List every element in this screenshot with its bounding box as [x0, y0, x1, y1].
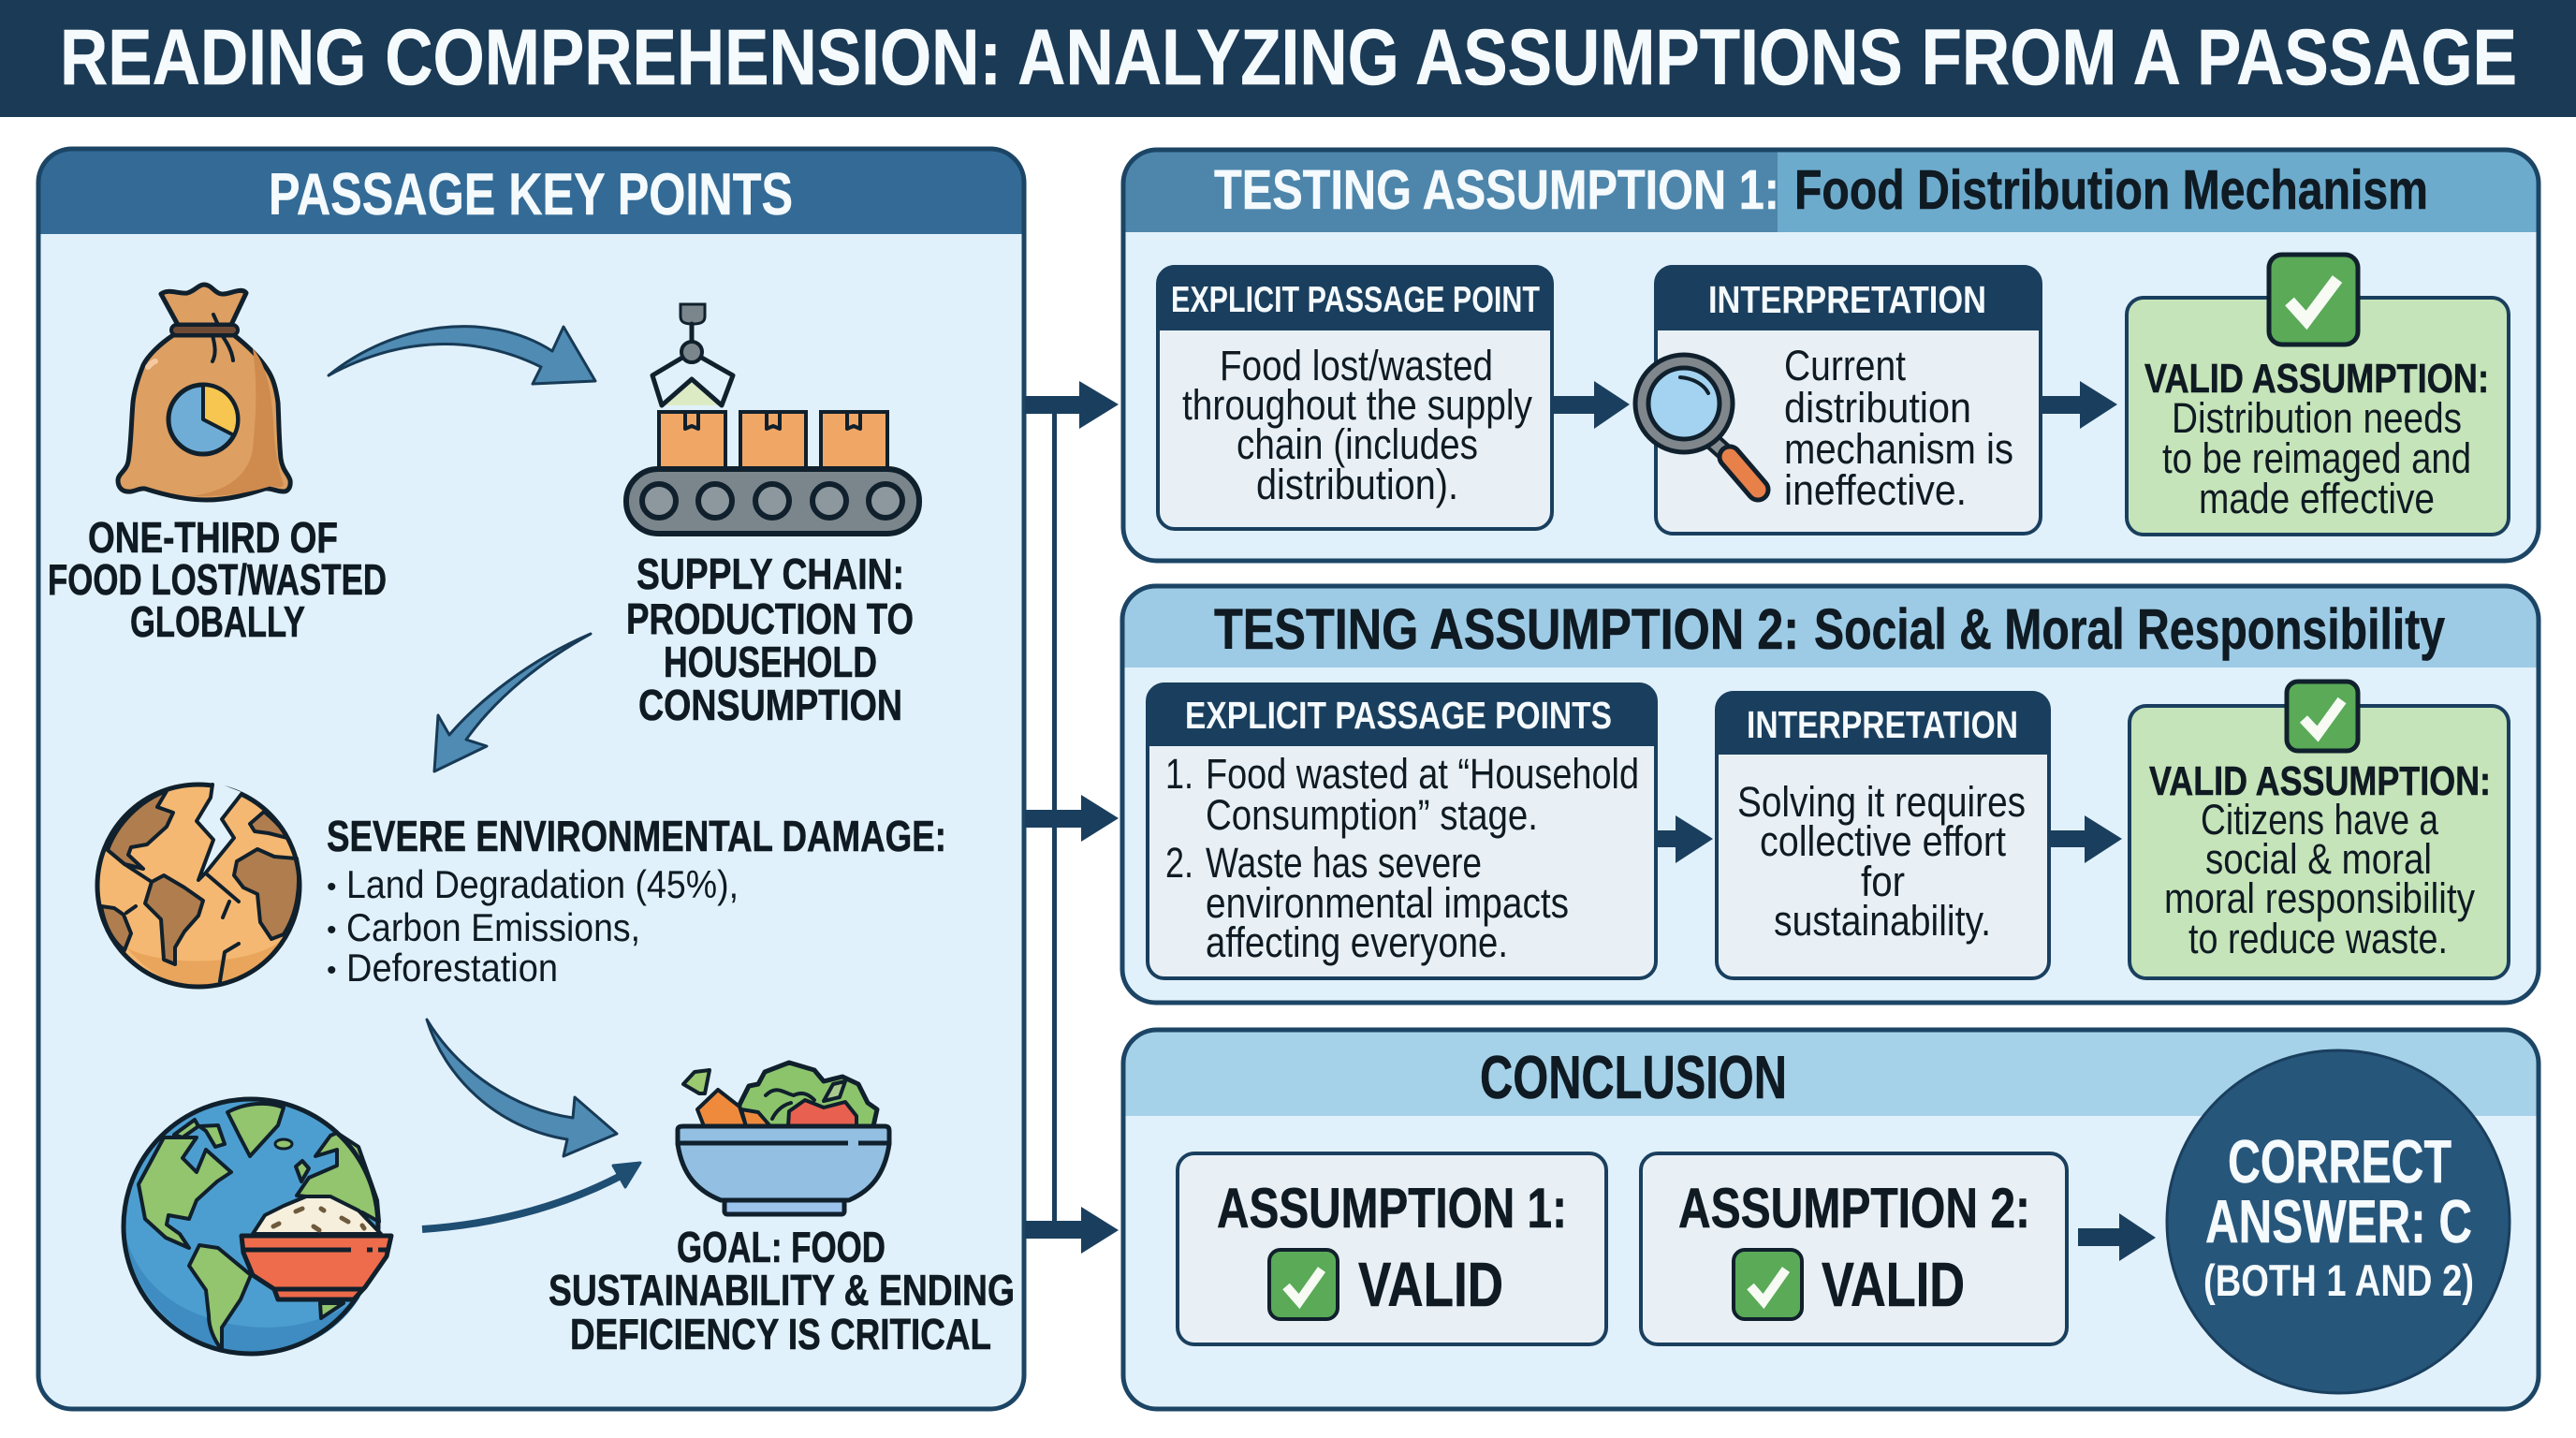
box: explicit passage points: Consumption” stage.	[1206, 791, 1538, 839]
box: interpretation: collective effort	[1760, 817, 2006, 865]
icon: check badge	[2287, 682, 2358, 751]
heading: conclusion	[1123, 1030, 2539, 1116]
box: explicit passage points: affecting everyone.	[1206, 918, 1508, 966]
box: explicit passage points: environmental impacts	[1206, 879, 1569, 927]
box: valid assumption 1: Distribution needs	[2172, 394, 2462, 442]
box: explicit passage point: chain (includes	[1237, 420, 1478, 468]
box: interpretation	[1717, 691, 2049, 978]
text: goal: SUSTAINABILITY & ENDING	[549, 1266, 1015, 1314]
heading: testing assumption 1: Food Distribution Mechanism	[1794, 159, 2428, 221]
heading: passage key points	[38, 149, 1024, 234]
text: severe environmental damage: •	[327, 955, 337, 986]
box: interpretation	[1656, 265, 2041, 534]
box: interpretation: for	[1861, 858, 1905, 905]
box: valid assumption 1	[2127, 255, 2509, 535]
box: valid assumption 2	[2130, 682, 2509, 978]
box: explicit passage points: 1.	[1165, 750, 1193, 798]
icon: check	[1734, 1250, 1802, 1319]
box: valid assumption 2: social & moral	[2205, 835, 2432, 883]
heading: testing assumption 2: TESTING ASSUMPTION 2:	[1214, 597, 1799, 661]
box: valid assumption 2: moral responsibility	[2164, 874, 2475, 922]
box: valid assumption 2: Citizens have a	[2201, 796, 2439, 844]
heading: testing assumption 2	[1122, 586, 2539, 668]
arrow: interpretation to valid	[2042, 381, 2117, 429]
text: severe environmental damage: Carbon Emissions,	[346, 905, 640, 949]
text: supply chain: SUPPLY CHAIN:	[637, 550, 904, 598]
text: one-third of food: GLOBALLY	[130, 597, 305, 646]
box: interpretation: Solving it requires	[1737, 778, 2026, 826]
text: goal: GOAL: FOOD	[677, 1223, 886, 1271]
box: explicit passage points	[1148, 682, 1656, 978]
panel: testing assumption 2	[1122, 586, 2539, 1003]
heading: testing assumption 1: TESTING ASSUMPTION 1:	[1214, 159, 1779, 221]
box: explicit passage point	[1158, 265, 1552, 529]
box: valid assumption 1: to be reimaged and	[2162, 434, 2471, 482]
callout: correct answer	[2167, 1050, 2510, 1393]
box: interpretation: Current	[1784, 342, 1906, 389]
box: assumption 1 valid: VALID	[1358, 1250, 1503, 1320]
heading: conclusion: CONCLUSION	[1480, 1043, 1787, 1111]
box: interpretation: INTERPRETATION	[1708, 278, 1986, 321]
text: severe environmental damage: Deforestation	[346, 946, 558, 990]
box: assumption 2 valid: ASSUMPTION 2:	[1678, 1177, 2030, 1240]
box: interpretation: sustainability.	[1774, 897, 1991, 945]
icon: salad bowl	[678, 1063, 889, 1214]
icon: cracked earth	[97, 781, 300, 987]
box: explicit passage point: Food lost/wasted	[1220, 342, 1493, 389]
text: supply chain: HOUSEHOLD	[664, 638, 877, 686]
box: explicit passage point: distribution).	[1256, 461, 1458, 508]
text: supply chain	[626, 550, 914, 729]
box: explicit passage points: 2.	[1165, 839, 1193, 887]
arrow: sack to supply chain	[329, 327, 595, 384]
text: severe environmental damage: •	[327, 915, 337, 946]
arrow: supply chain to environmental damage	[434, 634, 591, 771]
icon: food sack with pie chart	[118, 285, 290, 500]
arrow: passage point to interpretation	[1554, 381, 1630, 429]
box: assumption 1 valid	[1178, 1153, 1606, 1344]
arrow: environmental damage to goal	[427, 1020, 617, 1156]
text: goal	[549, 1223, 1015, 1358]
box: interpretation: distribution	[1784, 384, 1971, 432]
text: one-third of food: FOOD LOST/WASTED	[48, 555, 387, 604]
panel: passage key points	[38, 149, 1024, 1409]
text: one-third of food	[48, 513, 387, 646]
box: explicit passage points: EXPLICIT PASSAGE POINTS	[1185, 694, 1612, 737]
text: goal: DEFICIENCY IS CRITICAL	[570, 1310, 991, 1358]
box: explicit passage point: throughout the supply	[1182, 381, 1532, 429]
callout: correct answer: ANSWER: C	[2205, 1187, 2472, 1255]
icon: globe with rice bowl	[124, 1099, 391, 1354]
icon: supply chain conveyor	[626, 304, 919, 534]
box: assumption 2 valid	[1641, 1153, 2067, 1344]
box: valid assumption 1: made effective	[2199, 475, 2435, 522]
text: one-third of food: ONE-THIRD OF	[88, 513, 338, 562]
box: interpretation: ineffective.	[1784, 466, 1967, 514]
box: explicit passage points: Food wasted at “Household	[1206, 750, 1639, 798]
arrow: interpretation to valid	[2050, 815, 2122, 863]
box: explicit passage point: EXPLICIT PASSAGE POINT	[1171, 280, 1540, 320]
arrow: passage points to interpretation	[1658, 815, 1713, 863]
panel: testing assumption 1	[1123, 150, 2539, 561]
box: interpretation: mechanism is	[1784, 425, 2013, 473]
box: explicit passage points: Waste has severe	[1206, 839, 1482, 887]
heading: passage key points: PASSAGE KEY POINTS	[269, 162, 793, 227]
box: valid assumption 1: VALID ASSUMPTION:	[2144, 356, 2489, 402]
box: valid assumption 2: VALID ASSUMPTION:	[2149, 758, 2491, 804]
text: supply chain: CONSUMPTION	[638, 681, 902, 729]
panel: conclusion	[1123, 1030, 2539, 1409]
box: assumption 1 valid: ASSUMPTION 1:	[1217, 1177, 1567, 1240]
text: supply chain: PRODUCTION TO	[626, 594, 914, 643]
box: assumption 2 valid: VALID	[1822, 1250, 1965, 1320]
callout: correct answer: CORRECT	[2228, 1127, 2452, 1196]
connector: vertical trunk with arrows into right panels	[1025, 381, 1119, 1254]
heading: testing assumption 1	[1123, 150, 2539, 232]
box: valid assumption 2: to reduce waste.	[2188, 915, 2448, 962]
icon: check badge	[2269, 255, 2358, 345]
box: interpretation: INTERPRETATION	[1747, 703, 2018, 746]
arrow: to correct answer	[2078, 1213, 2156, 1261]
text: severe environmental damage	[327, 812, 946, 990]
callout: correct answer: (BOTH 1 AND 2)	[2203, 1255, 2474, 1305]
text: severe environmental damage: Land Degradation (45%),	[346, 862, 739, 906]
icon: check	[1269, 1250, 1338, 1319]
icon: magnifying glass	[1635, 355, 1758, 490]
arrow: globe to goal	[422, 1163, 640, 1229]
text: severe environmental damage: •	[327, 872, 337, 902]
text: severe environmental damage: SEVERE ENVIRONMENTAL DAMAGE:	[327, 812, 946, 860]
